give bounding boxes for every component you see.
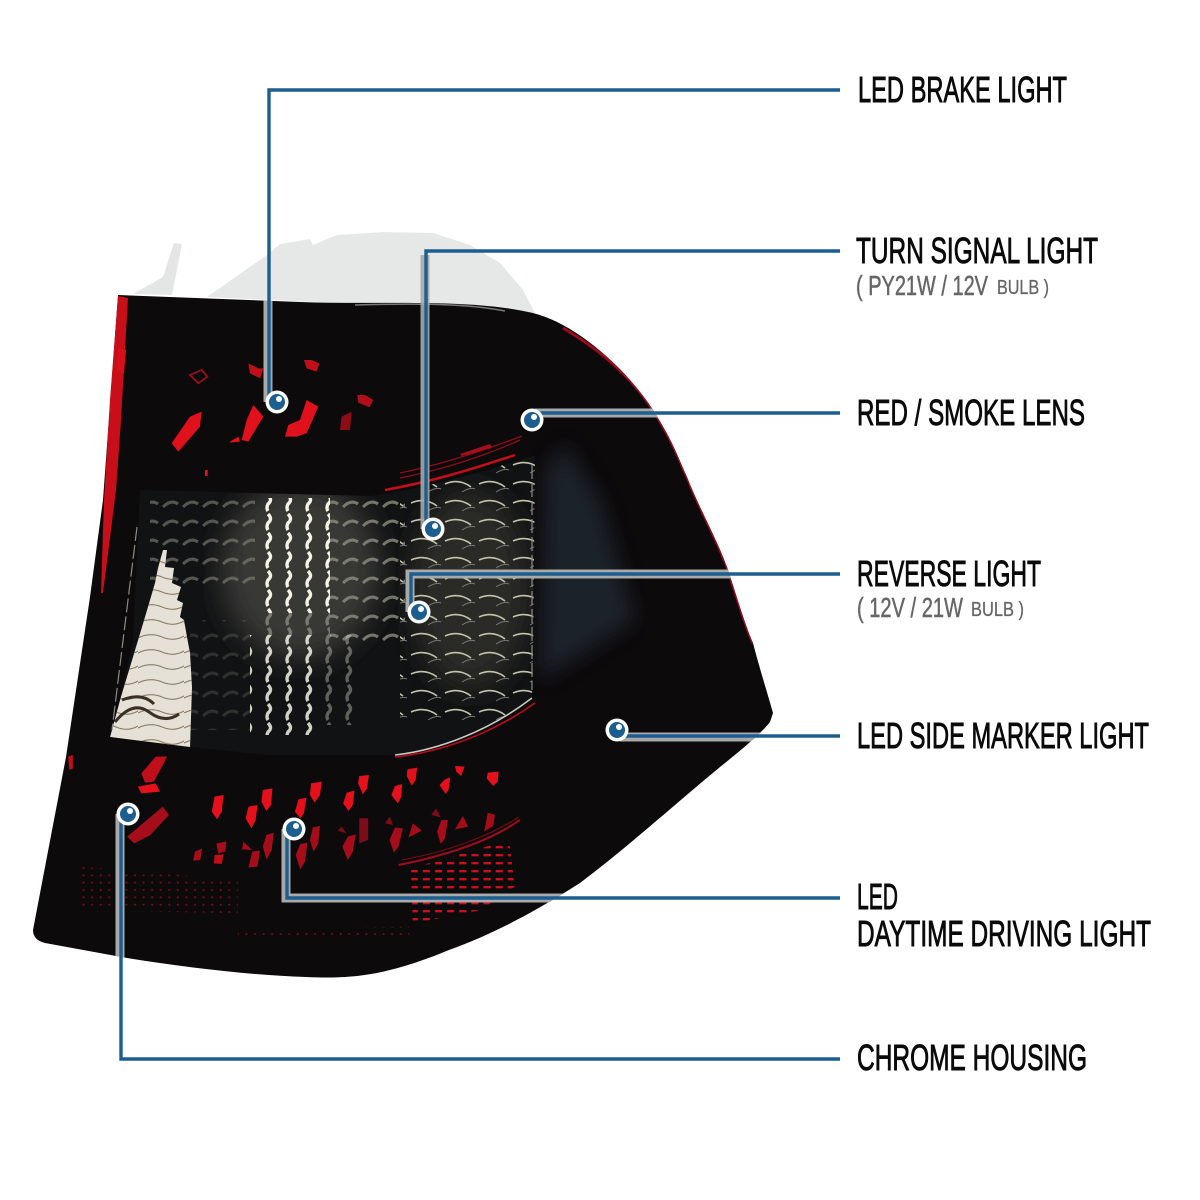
leader: turn signal light: [422, 251, 840, 540]
marker dot: [408, 600, 430, 624]
label: LED daytime driving light: LED: [857, 876, 898, 917]
leader: reverse light: [408, 574, 840, 624]
LED brake light elements: [117, 348, 373, 476]
red rim below lens: [395, 703, 535, 757]
lens outer edge glints: [112, 465, 532, 730]
reverse light lens with reflector texture: [100, 450, 540, 760]
label: turn signal light: BULB ): [997, 277, 1049, 299]
label: LED daytime driving light: [857, 876, 1151, 954]
chrome reflector step: [110, 550, 192, 748]
label: turn signal light: [856, 230, 1098, 301]
label: LED brake light: LED BRAKE LIGHT: [858, 69, 1067, 110]
dark blue side panel of lens: [540, 445, 635, 680]
infographic: tail light feature diagram: [33, 76, 1151, 1071]
label: red / smoke lens: RED / SMOKE LENS: [857, 392, 1085, 433]
marker dot: [116, 802, 140, 826]
marker dot: [266, 390, 288, 414]
label: reverse light: REVERSE LIGHT: [857, 553, 1041, 594]
top edge highlight: [355, 304, 505, 311]
tail light lens body: [33, 295, 773, 978]
red left edge strip: [101, 296, 128, 593]
marker dot: [422, 518, 444, 540]
red outer edge: [563, 328, 753, 643]
label: reverse light: BULB ): [971, 599, 1024, 621]
marker dot: [606, 718, 628, 742]
chrome housing behind the lens: [133, 232, 535, 313]
leader: LED side marker light: [606, 718, 840, 742]
label: chrome housing: CHROME HOUSING: [857, 1037, 1087, 1078]
marker dot: [520, 408, 544, 432]
upper red reflections: [385, 436, 522, 490]
leader: LED brake light: [266, 90, 840, 414]
label: reverse light: ( 12V / 21W: [857, 592, 963, 623]
lens rim highlight: [395, 698, 532, 755]
leader: red / smoke lens: [520, 408, 840, 432]
label: reverse light: [857, 553, 1041, 623]
marker dot: [282, 818, 306, 840]
leader: chrome housing: [116, 802, 840, 1059]
leader: LED daytime driving light: [282, 818, 840, 898]
label: turn signal light: ( PY21W / 12V: [856, 270, 988, 301]
LED daytime driving light elements: [68, 755, 520, 940]
